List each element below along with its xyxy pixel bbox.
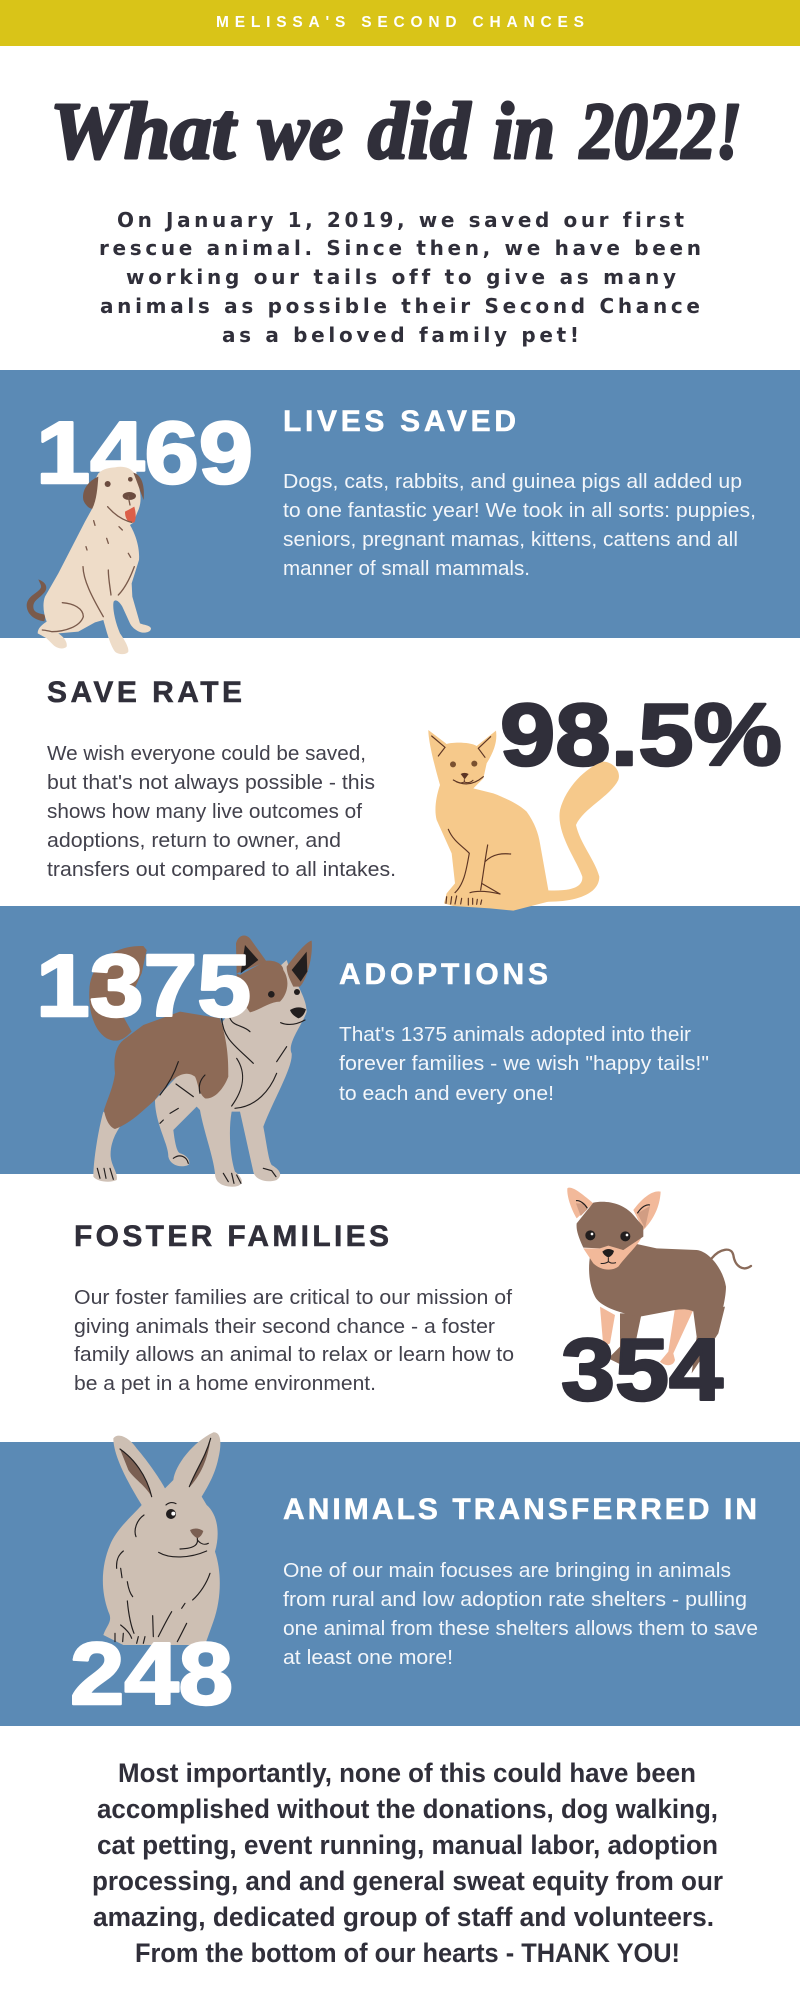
text: save rate description: We wish everyone could be saved, <box>47 742 366 765</box>
panel: foster families <box>0 1174 800 1442</box>
panel: adoptions <box>0 906 800 1187</box>
closing thank you text: accomplished without the donations, dog walking, <box>97 1794 718 1824</box>
closing thank you text: processing, and and general sweat equity from our <box>92 1866 723 1896</box>
icon: rabbit <box>103 1432 220 1645</box>
text: lives saved description: seniors, pregnant mamas, kittens, cattens and all <box>283 528 738 551</box>
heading: animals transferred in: ANIMALS TRANSFERRED IN <box>283 1493 757 1526</box>
text: foster families description <box>74 1286 514 1395</box>
intro text: working our tails off to give as many <box>126 265 676 289</box>
heading: adoptions: ADOPTIONS <box>339 958 548 991</box>
text: adoptions description <box>339 1023 709 1105</box>
text: lives saved description: manner of small mammals. <box>283 557 530 580</box>
number: 354: 354 <box>561 1320 723 1419</box>
number: 1469: 1469 <box>36 403 253 502</box>
text: animals transferred in description: one animal from these shelters allows them to save <box>283 1617 758 1640</box>
intro text: animals as possible their Second Chance <box>100 294 700 318</box>
text: save rate description: but that's not always possible - this <box>47 771 375 794</box>
header banner: MELISSA'S SECOND CHANCES <box>216 14 584 31</box>
header banner <box>0 0 800 46</box>
title <box>50 88 742 176</box>
icon: sitting dog <box>27 467 151 654</box>
intro text: On January 1, 2019, we saved our first <box>117 208 684 232</box>
closing thank you text: amazing, dedicated group of staff and volunteers. <box>93 1902 714 1932</box>
text: save rate description: transfers out compared to all intakes. <box>47 858 396 881</box>
text: foster families description: be a pet in a home environment. <box>74 1372 376 1395</box>
number: 98.5%: 98.5% <box>500 685 782 784</box>
number: 248: 248 <box>70 1624 233 1723</box>
number: 1375: 1375 <box>36 936 251 1035</box>
text: adoptions description: forever families - we wish "happy tails!" <box>339 1052 709 1075</box>
closing thank you text: From the bottom of our hearts - THANK YOU! <box>135 1938 680 1968</box>
text: foster families description: giving animals their second chance - a foster <box>74 1315 495 1338</box>
icon: standing brown dog <box>89 936 312 1187</box>
text: animals transferred in description <box>283 1559 758 1669</box>
text: lives saved description <box>283 470 756 580</box>
title: we <box>258 88 343 176</box>
intro text <box>99 208 701 347</box>
title: 2022! <box>579 88 742 176</box>
text: save rate description <box>47 742 396 881</box>
text: lives saved description: to one fantastic year! We took in all sorts: puppies, <box>283 499 756 522</box>
heading: save rate: SAVE RATE <box>47 676 242 709</box>
text: save rate description: adoptions, return to owner, and <box>47 829 341 852</box>
text: animals transferred in description: at least one more! <box>283 1646 453 1669</box>
panel: save rate <box>0 638 800 911</box>
closing thank you text: Most importantly, none of this could have been <box>118 1758 696 1788</box>
text: animals transferred in description: from rural and low adoption rate shelters - pulling <box>283 1588 747 1611</box>
panel: animals transferred in <box>0 1432 800 1726</box>
icon: sitting cat <box>428 730 619 911</box>
closing thank you text: cat petting, event running, manual labor, adoption <box>97 1830 718 1860</box>
text: foster families description: family allows an animal to relax or learn how to <box>74 1343 514 1366</box>
intro text: rescue animal. Since then, we have been <box>99 236 701 260</box>
icon: chihuahua <box>567 1188 751 1373</box>
intro text: as a beloved family pet! <box>222 323 579 347</box>
text: adoptions description: That's 1375 animals adopted into their <box>339 1023 691 1046</box>
text: animals transferred in description: One of our main focuses are bringing in animals <box>283 1559 731 1582</box>
text: save rate description: shows how many live outcomes of <box>47 800 362 823</box>
title: What <box>50 88 238 176</box>
text: foster families description: Our foster families are critical to our mission of <box>74 1286 512 1309</box>
closing thank you text <box>92 1758 723 1968</box>
title: in <box>493 88 555 176</box>
title: did <box>368 88 471 176</box>
heading: lives saved: LIVES SAVED <box>283 405 516 438</box>
panel: lives saved <box>0 370 800 654</box>
text: adoptions description: to each and every one! <box>339 1082 554 1105</box>
heading: foster families: FOSTER FAMILIES <box>74 1220 389 1253</box>
text: lives saved description: Dogs, cats, rabbits, and guinea pigs all added up <box>283 470 742 493</box>
